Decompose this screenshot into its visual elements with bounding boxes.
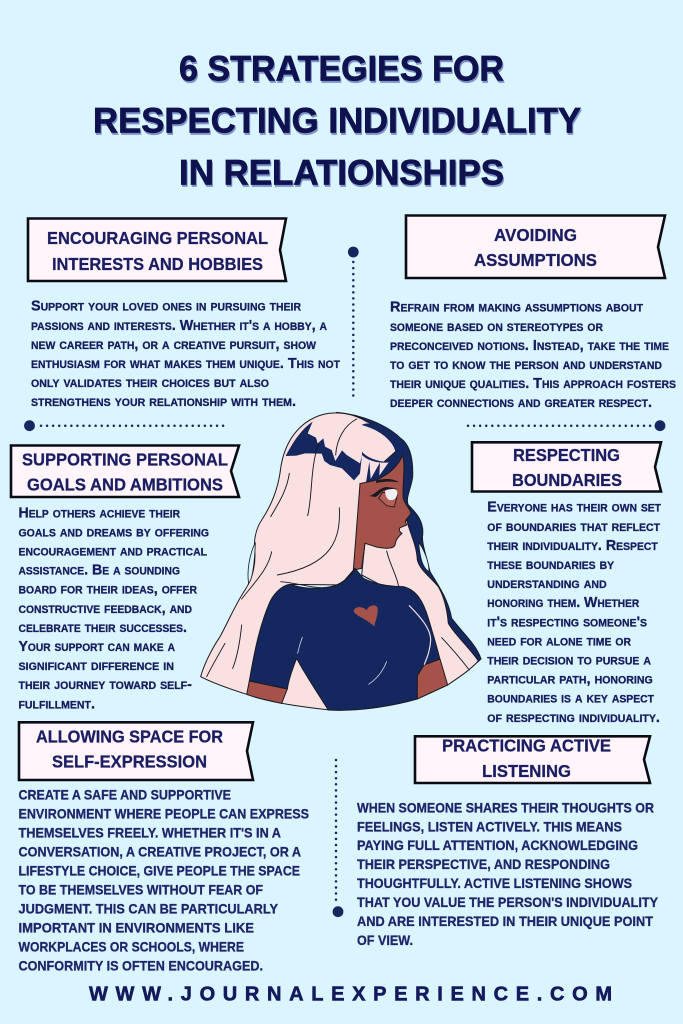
body text: encouraging personal interests: only validates their choices but also — [31, 374, 269, 391]
footer website: WWW.JOURNALEXPERIENCE.COM — [89, 984, 612, 1006]
body text: respecting boundaries: it's respecting someone's — [487, 613, 647, 630]
body text: supporting personal goals: celebrate their successes. — [18, 619, 187, 636]
heading banner: avoiding assumptions: AVOIDING — [494, 225, 577, 245]
heading banner: practicing active listening — [415, 736, 650, 783]
left pink hair — [201, 413, 397, 710]
heading banner: practicing active listening: PRACTICING ACTIVE — [442, 736, 611, 756]
eye — [369, 487, 397, 507]
body text: respecting boundaries: these boundaries by — [487, 556, 615, 573]
body text: practicing active listening — [357, 799, 659, 948]
navy hair streak at crown — [286, 422, 362, 480]
right hair inner gap — [419, 542, 429, 572]
body text: supporting personal goals: Help others achieve their — [18, 504, 180, 521]
body text: allowing space for self-expression: IMPORTANT IN ENVIRONMENTS LIKE — [18, 919, 254, 935]
body text: respecting boundaries: need for alone time or — [487, 632, 631, 649]
body text: avoiding assumptions: Refrain from making assumptions about — [390, 299, 643, 316]
body text: avoiding assumptions: to get to know the person and understand — [390, 356, 662, 373]
panel: respecting boundaries — [472, 442, 661, 726]
pink bang spikes — [360, 455, 389, 483]
body text: allowing space for self-expression: WORKPLACES OR SCHOOLS, WHERE — [18, 938, 244, 954]
panel: avoiding assumptions — [390, 216, 676, 411]
heading banner: supporting personal goals and ambitions: GOALS AND AMBITIONS — [27, 475, 223, 495]
body text: supporting personal goals: their journey toward self- — [18, 676, 192, 693]
body text: supporting personal goals: constructive feedback, and — [18, 600, 192, 617]
body text: encouraging personal interests: enthusiasm for what makes them unique. This not — [31, 355, 340, 372]
body text: allowing space for self-expression: LIFESTYLE CHOICE, GIVE PEOPLE THE SPACE — [18, 862, 300, 878]
body text: respecting boundaries: Everyone has their own set — [487, 499, 661, 516]
body text: practicing active listening: THEIR PERSPECTIVE, AND RESPONDING — [357, 856, 610, 872]
body text: allowing space for self-expression: CREATE A SAFE AND SUPPORTIVE — [18, 787, 231, 803]
title: RESPECTING INDIVIDUALITY — [93, 101, 581, 141]
heading banner: avoiding assumptions — [406, 216, 665, 278]
right pink hair — [362, 520, 478, 685]
body text: avoiding assumptions — [390, 299, 676, 411]
body text: supporting personal goals: encouragement and practical — [18, 542, 207, 560]
body text: respecting boundaries — [487, 499, 661, 726]
heading banner: encouraging personal interests and hobbies: ENCOURAGING PERSONAL — [47, 228, 268, 248]
body text: allowing space for self-expression: JUDGMENT. THIS CAN BE PARTICULARLY — [18, 900, 279, 916]
heading banner: avoiding assumptions: ASSUMPTIONS — [474, 250, 597, 270]
face and neck — [353, 455, 411, 570]
navy top with short sleeves — [249, 568, 440, 710]
body text: respecting boundaries: of respecting individuality. — [487, 709, 660, 726]
body text: supporting personal goals: fulfillment. — [18, 695, 95, 712]
right arm — [417, 659, 448, 699]
body text: supporting personal goals — [18, 504, 209, 712]
body text: supporting personal goals: significant difference in — [18, 657, 174, 674]
body text: encouraging personal interests: Support your loved ones in pursuing their — [31, 298, 301, 315]
body text: respecting boundaries: their decision to pursue a — [487, 652, 651, 668]
connector: left horizontal dotted line — [24, 420, 224, 431]
eyebrow — [376, 479, 399, 483]
heart — [354, 605, 378, 626]
connector: top vertical dotted line — [348, 247, 359, 398]
body text: encouraging personal interests — [31, 298, 340, 410]
body text: practicing active listening: PAYING FULL ATTENTION, ACKNOWLEDGING — [357, 837, 638, 853]
left arm — [247, 681, 287, 703]
panel: practicing active listening — [357, 736, 659, 948]
connector: right horizontal dotted line — [468, 420, 665, 431]
body text: supporting personal goals: goals and dreams by offering — [18, 523, 209, 540]
body text: respecting boundaries: of boundaries that reflect — [487, 518, 660, 535]
panel: encouraging personal interests — [28, 218, 340, 410]
body text: supporting personal goals: assistance. Be a sounding — [18, 562, 180, 579]
heading banner: allowing space for self-expression: SELF-EXPRESSION — [52, 752, 207, 772]
body text: practicing active listening: FEELINGS, LISTEN ACTIVELY. THIS MEANS — [357, 818, 622, 834]
body text: encouraging personal interests: strengthens your relationship with them. — [31, 393, 296, 410]
hair strand lines — [207, 419, 469, 677]
body text: supporting personal goals: Your support can make a — [18, 638, 175, 655]
illustration: woman with long pink and navy hair — [201, 412, 481, 710]
title: IN RELATIONSHIPS — [179, 153, 504, 193]
heading banner: respecting boundaries: RESPECTING — [513, 445, 620, 465]
title: 6 STRATEGIES FOR — [179, 49, 504, 89]
heading banner: respecting boundaries — [472, 442, 661, 492]
heading banner: respecting boundaries: BOUNDARIES — [512, 470, 622, 490]
body text: avoiding assumptions: preconceived notions. Instead, take the time — [390, 337, 669, 354]
left hair side loop — [248, 542, 255, 583]
heading banner: supporting personal goals and ambitions — [11, 446, 239, 497]
panel: supporting personal goals — [11, 446, 239, 712]
highlights on top — [298, 606, 431, 684]
body text: supporting personal goals: board for their ideas, offer — [18, 581, 197, 598]
body text: respecting boundaries: boundaries is a key aspect — [487, 690, 654, 707]
body text: allowing space for self-expression: THEMSELVES FREELY. WHETHER IT'S IN A — [18, 825, 281, 841]
body text: allowing space for self-expression: CONVERSATION, A CREATIVE PROJECT, OR A — [18, 844, 301, 860]
body text: practicing active listening: WHEN SOMEONE SHARES THEIR THOUGHTS OR — [357, 799, 654, 815]
heading banner: allowing space for self-expression — [19, 722, 253, 780]
panel: allowing space for self-expression — [18, 722, 309, 973]
navy back hair — [337, 412, 481, 662]
body text: encouraging personal interests: passions and interests. Whether it's a hobby, a — [31, 317, 327, 334]
heading banner: encouraging personal interests and hobbies — [28, 218, 286, 281]
heading banner: supporting personal goals and ambitions: SUPPORTING PERSONAL — [22, 450, 228, 470]
body text: respecting boundaries: particular path, honoring — [487, 671, 653, 688]
body text: respecting boundaries: their individuality. Respect — [487, 537, 658, 554]
body text: practicing active listening: THAT YOU VALUE THE PERSON'S INDIVIDUALITY — [357, 894, 659, 910]
body text: avoiding assumptions: someone based on stereotypes or — [390, 318, 603, 335]
body text: allowing space for self-expression: ENVIRONMENT WHERE PEOPLE CAN EXPRESS — [18, 806, 309, 822]
title — [93, 49, 581, 193]
body text: allowing space for self-expression: CONFORMITY IS OFTEN ENCOURAGED. — [18, 957, 263, 973]
body text: respecting boundaries: understanding and — [487, 575, 607, 592]
heading banner: encouraging personal interests and hobbies: INTERESTS AND HOBBIES — [52, 254, 263, 274]
body text: allowing space for self-expression: TO BE THEMSELVES WITHOUT FEAR OF — [18, 881, 263, 897]
heading banner: allowing space for self-expression: ALLOWING SPACE FOR — [36, 727, 223, 747]
connector: bottom vertical dotted line — [333, 760, 343, 917]
body text: encouraging personal interests: new career path, or a creative pursuit, show — [31, 336, 317, 353]
body text: practicing active listening: OF VIEW. — [357, 932, 413, 948]
heading banner: practicing active listening: LISTENING — [482, 761, 571, 781]
body text: allowing space for self-expression — [18, 787, 309, 973]
body text: practicing active listening: THOUGHTFULLY. ACTIVE LISTENING SHOWS — [357, 875, 632, 891]
body text: respecting boundaries: honoring them. Whether — [487, 594, 639, 611]
body text: avoiding assumptions: deeper connections and greater respect. — [390, 394, 652, 411]
body text: practicing active listening: AND ARE INTERESTED IN THEIR UNIQUE POINT — [357, 913, 653, 929]
